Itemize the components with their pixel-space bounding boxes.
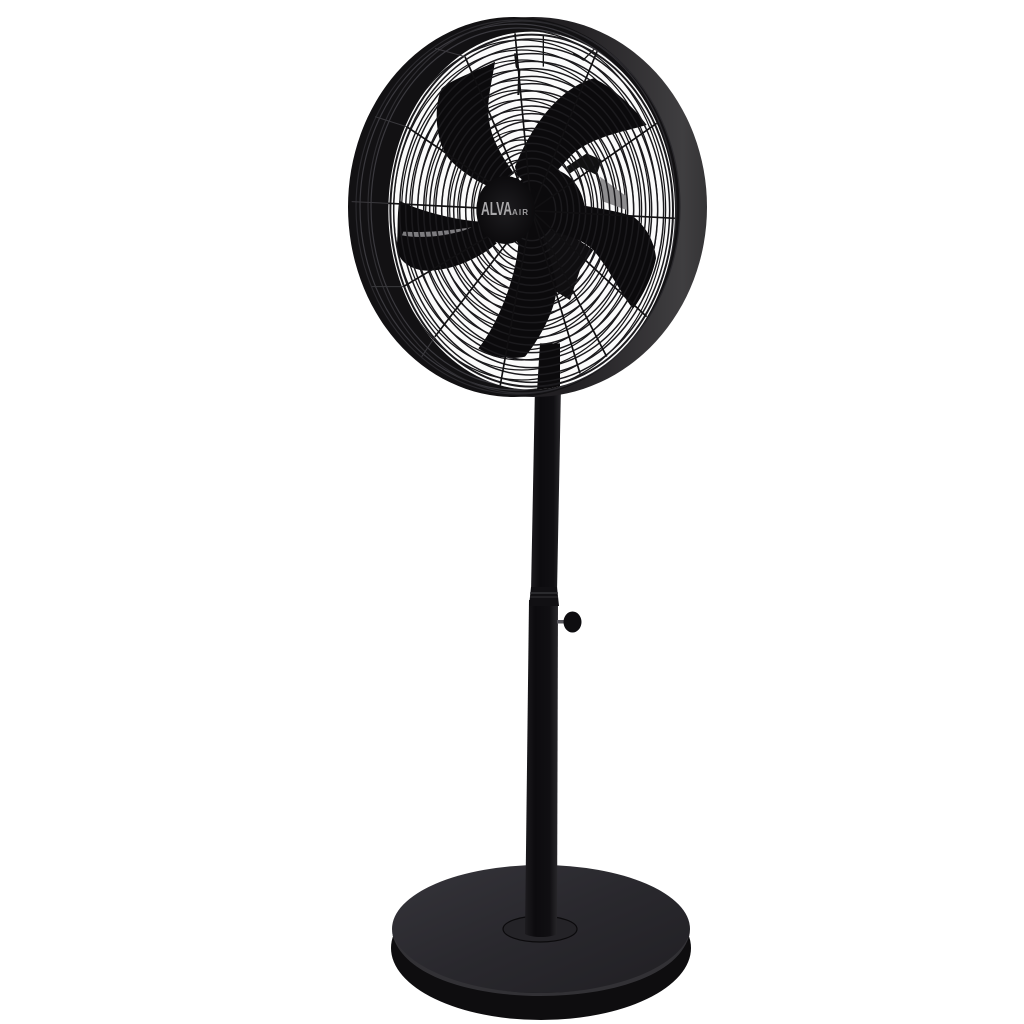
upper pole: [531, 385, 561, 592]
product illustration: pedestal fan: [348, 17, 707, 1020]
lower pole: [525, 600, 558, 937]
blade 3: [578, 206, 656, 308]
ring detail lines: [356, 20, 680, 394]
logo suffix: AIR: [512, 208, 528, 217]
hub: [476, 176, 535, 244]
blade 2: [515, 78, 647, 180]
grille spokes: [388, 33, 675, 387]
base: [391, 865, 691, 1020]
front grille rings: [390, 35, 673, 387]
blade 1: [437, 62, 514, 188]
motor and bracket: [508, 35, 627, 397]
rear drum housing: [359, 17, 707, 397]
rear grille rings: [378, 30, 666, 390]
blade 4: [478, 233, 557, 358]
grille and blades: [352, 30, 675, 397]
logo: ALVA: [481, 199, 512, 219]
grille opening: [388, 32, 675, 390]
fan head: [348, 17, 707, 397]
blade highlight strip: [402, 227, 472, 237]
front ring: [348, 17, 680, 397]
spoke extensions across ring: [352, 48, 465, 357]
height adjustment collar: [529, 587, 559, 606]
blade 5: [397, 201, 497, 271]
base plate: [503, 916, 577, 942]
adjustment knob: [557, 612, 582, 632]
